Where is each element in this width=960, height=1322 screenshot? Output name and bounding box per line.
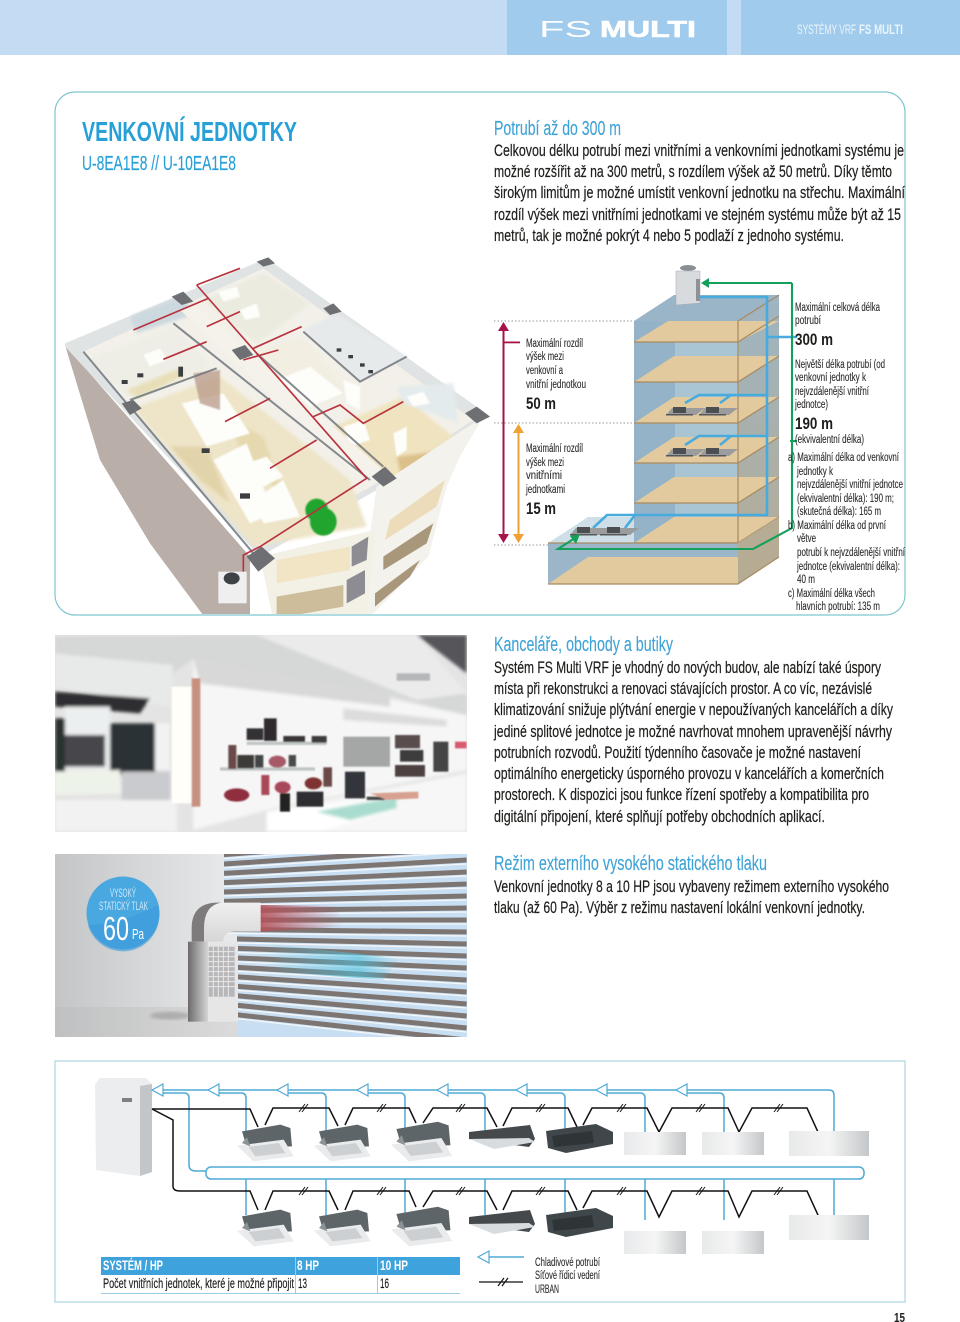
- legend: Chladivové potrubí: [535, 1257, 601, 1269]
- dotted height guides: [494, 321, 634, 545]
- label: total pipe lengths: (skutečná délka): 165 m: [797, 506, 881, 518]
- central corridor: [181, 306, 382, 474]
- table: connectable indoor units: [101, 1257, 460, 1294]
- indoor units: [570, 407, 738, 536]
- table: connectable indoor units: 8 HP: [297, 1257, 319, 1273]
- panel: outdoor units: [55, 92, 906, 620]
- furniture: [122, 348, 373, 499]
- panel: system wiring diagram: [55, 1061, 905, 1302]
- red pipes: [133, 268, 403, 577]
- left outer wall: [65, 345, 250, 620]
- text block: high static pressure mode: Režim externího vysokého statického tlaku: [494, 852, 767, 875]
- indoor units: lower row: [237, 1207, 869, 1254]
- floor plan: [83, 268, 473, 548]
- label: total pipe lengths: jednotce): [794, 399, 828, 411]
- logo: FS MULTI: MULTI: [600, 16, 696, 42]
- label: total pipe lengths: jednotky k: [796, 466, 833, 478]
- title: VENKOVNÍ JEDNOTKY: [82, 116, 297, 147]
- indoor unit and duct: [204, 902, 261, 942]
- legend: Síťové řídicí vedení: [535, 1270, 601, 1282]
- label: total pipe lengths: potrubí k nejvzdálenější vnitřní: [797, 547, 906, 559]
- label: total pipe lengths: [788, 302, 906, 613]
- label: total pipe lengths: potrubí: [795, 315, 822, 327]
- arrow: height 15 m: [513, 424, 524, 543]
- label: height 15 m: jednotkami: [525, 484, 565, 496]
- text block: piping up to 300 m: Potrubí až do 300 m: [494, 117, 621, 140]
- label: total pipe lengths: nejvzdálenější vnitřní jednotce: [797, 479, 903, 491]
- control wiring: [152, 1104, 818, 1217]
- label: total pipe lengths: c) Maximální délka všech: [788, 588, 875, 600]
- text block: piping up to 300 m: [494, 117, 905, 245]
- arrowheads: [152, 1084, 687, 1096]
- text block: offices, shops and boutiques: [493, 633, 893, 826]
- label: height 50 m: výšek mezi: [526, 351, 564, 363]
- table: connectable indoor units: 16: [380, 1276, 389, 1291]
- indoor units: upper row: [237, 1122, 869, 1161]
- model names: U-8EA1E8 // U-10EA1E8: [82, 153, 236, 175]
- refrigerant piping: [160, 1090, 864, 1220]
- label: height 50 m: 50 m: [526, 394, 556, 413]
- label: height 50 m: [526, 338, 586, 413]
- illustration: external static pressure: [55, 854, 467, 1037]
- base: [548, 543, 738, 584]
- label: height 50 m: venkovní a: [526, 365, 563, 377]
- arrow: height 50 m: [498, 322, 520, 543]
- badge: 60 Pa: 60: [103, 910, 129, 947]
- label: total pipe lengths: 300 m: [795, 330, 833, 349]
- louvre wall: [224, 854, 467, 1037]
- table: connectable indoor units: Počet vnitřních jednotek, které je možné připojit: [103, 1276, 294, 1291]
- text block: high static pressure mode: [494, 852, 889, 917]
- table: connectable indoor units: 13: [298, 1276, 307, 1291]
- label: total pipe lengths: 190 m: [795, 414, 833, 433]
- legend: [478, 1251, 601, 1296]
- label: total pipe lengths: (ekvivalentní délka): 190 m;: [797, 493, 894, 505]
- badge: 60 Pa: [86, 876, 160, 951]
- header band: [0, 0, 960, 55]
- blue refrigerant pipes: [593, 297, 797, 528]
- badge: 60 Pa: VYSOKÝ: [110, 887, 136, 900]
- label: total pipe lengths: 40 m: [797, 574, 815, 586]
- label: total pipe lengths: hlavních potrubí: 135 m: [796, 601, 880, 613]
- label: height 50 m: Maximální rozdíl: [526, 338, 583, 350]
- badge: 60 Pa: STATICKÝ TLAK: [99, 900, 148, 913]
- label: total pipe lengths: Největší délka potrubí (od: [795, 359, 885, 371]
- logo: FS MULTI: FS: [539, 16, 592, 42]
- building: [548, 295, 779, 584]
- label: total pipe lengths: b) Maximální délka od první: [788, 520, 887, 532]
- header title: FS MULTI: [859, 21, 903, 37]
- label: total pipe lengths: Maximální celková délka: [795, 302, 880, 314]
- outdoor fan: [218, 572, 247, 603]
- label: total pipe lengths: nejvzdálenější vnitřní: [795, 386, 870, 398]
- label: total pipe lengths: venkovní jednotky k: [795, 372, 866, 384]
- label: height 15 m: vnitřními: [526, 470, 562, 482]
- photo: shoe shop interior: [50, 630, 470, 840]
- roof edge walls: [65, 258, 488, 557]
- label: total pipe lengths: jednotce (ekvivalentní délka):: [796, 561, 900, 573]
- illustration: building cutaway with piping: [65, 257, 490, 620]
- label: height 15 m: [525, 443, 583, 518]
- header title: SYSTÉMY VRF: [797, 21, 856, 37]
- text block: offices, shops and boutiques: digitální připojení, které splňují potřeby obchodních aplikací.: [494, 807, 825, 826]
- outdoor unit: [95, 1078, 152, 1176]
- plant: [305, 499, 337, 536]
- label: height 50 m: vnitřní jednotkou: [526, 379, 586, 391]
- table: connectable indoor units: SYSTÉM / HP: [103, 1257, 163, 1273]
- partitions: [83, 323, 407, 553]
- logo: FS MULTI: [539, 16, 696, 42]
- diagram: riser with height and pipe-length limits: [494, 265, 906, 613]
- text block: offices, shops and boutiques: Kanceláře, obchody a butiky: [494, 633, 674, 656]
- label: total pipe lengths: větve: [797, 533, 816, 545]
- green pipe with arrows: [558, 278, 797, 549]
- label: height 15 m: výšek mezi: [526, 457, 564, 469]
- outdoor unit: [676, 265, 700, 305]
- right front wall and lower floors: [367, 417, 483, 620]
- table: connectable indoor units: 10 HP: [380, 1257, 408, 1273]
- label: total pipe lengths: a) Maximální délka od venkovní: [788, 452, 900, 464]
- label: total pipe lengths: (ekvivalentní délka): [795, 434, 864, 446]
- legend: URBAN: [535, 1284, 559, 1296]
- label: height 15 m: Maximální rozdíl: [526, 443, 583, 455]
- pillars: [122, 257, 490, 572]
- badge: 60 Pa: Pa: [132, 926, 144, 943]
- label: height 15 m: 15 m: [526, 499, 556, 518]
- floor plates: [634, 321, 779, 543]
